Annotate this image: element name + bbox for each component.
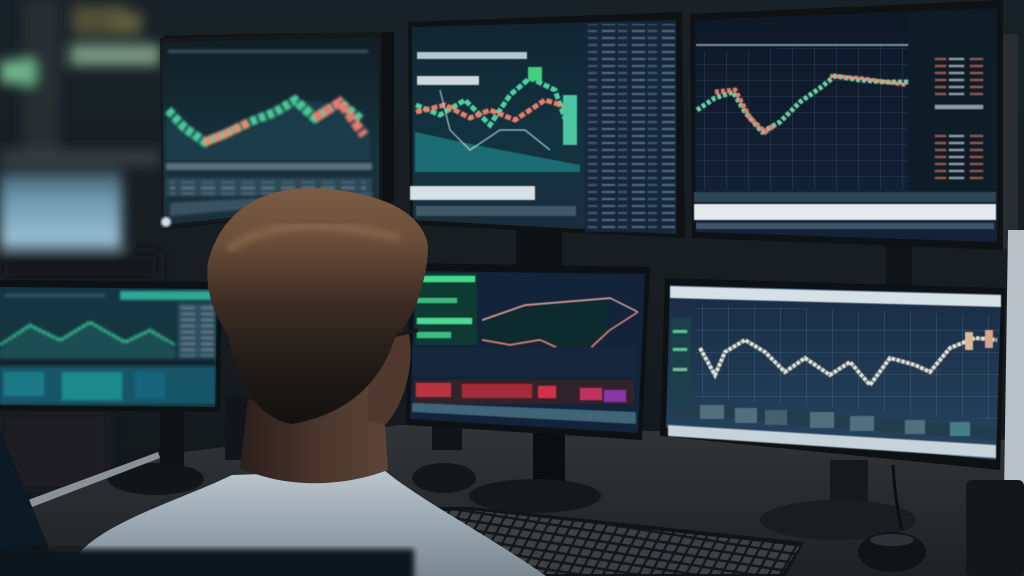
monitor: bottom right xyxy=(660,278,1005,470)
glasses xyxy=(385,330,418,337)
monitor stand: bottom centre xyxy=(469,430,601,513)
ear and face xyxy=(368,330,411,425)
monitor: top centre xyxy=(408,12,685,238)
right edge equipment xyxy=(966,480,1024,576)
monitor: top left xyxy=(160,32,394,230)
monitor stand: top centre xyxy=(516,230,562,270)
trader: back of person xyxy=(80,188,546,576)
monitor: bottom left xyxy=(0,280,222,412)
desk edge strip xyxy=(28,452,160,507)
chair xyxy=(0,430,48,550)
keyboard xyxy=(398,507,804,576)
foreground chair blur xyxy=(0,549,414,576)
monitor: bottom centre xyxy=(406,263,650,440)
mouse: small left xyxy=(375,484,405,500)
monitor stand: top right xyxy=(886,245,912,285)
monitor stand: bottom right xyxy=(760,460,916,540)
monitor: top right xyxy=(690,0,1018,250)
monitor stand: bottom left xyxy=(108,408,204,495)
mouse: right xyxy=(858,532,926,572)
desk surface xyxy=(30,425,1024,576)
shirt xyxy=(80,470,546,576)
neck xyxy=(240,380,388,483)
right edge panel xyxy=(1004,230,1024,494)
hair xyxy=(207,188,428,424)
rear stand legs xyxy=(432,422,462,450)
mouse: small centre xyxy=(412,463,476,493)
